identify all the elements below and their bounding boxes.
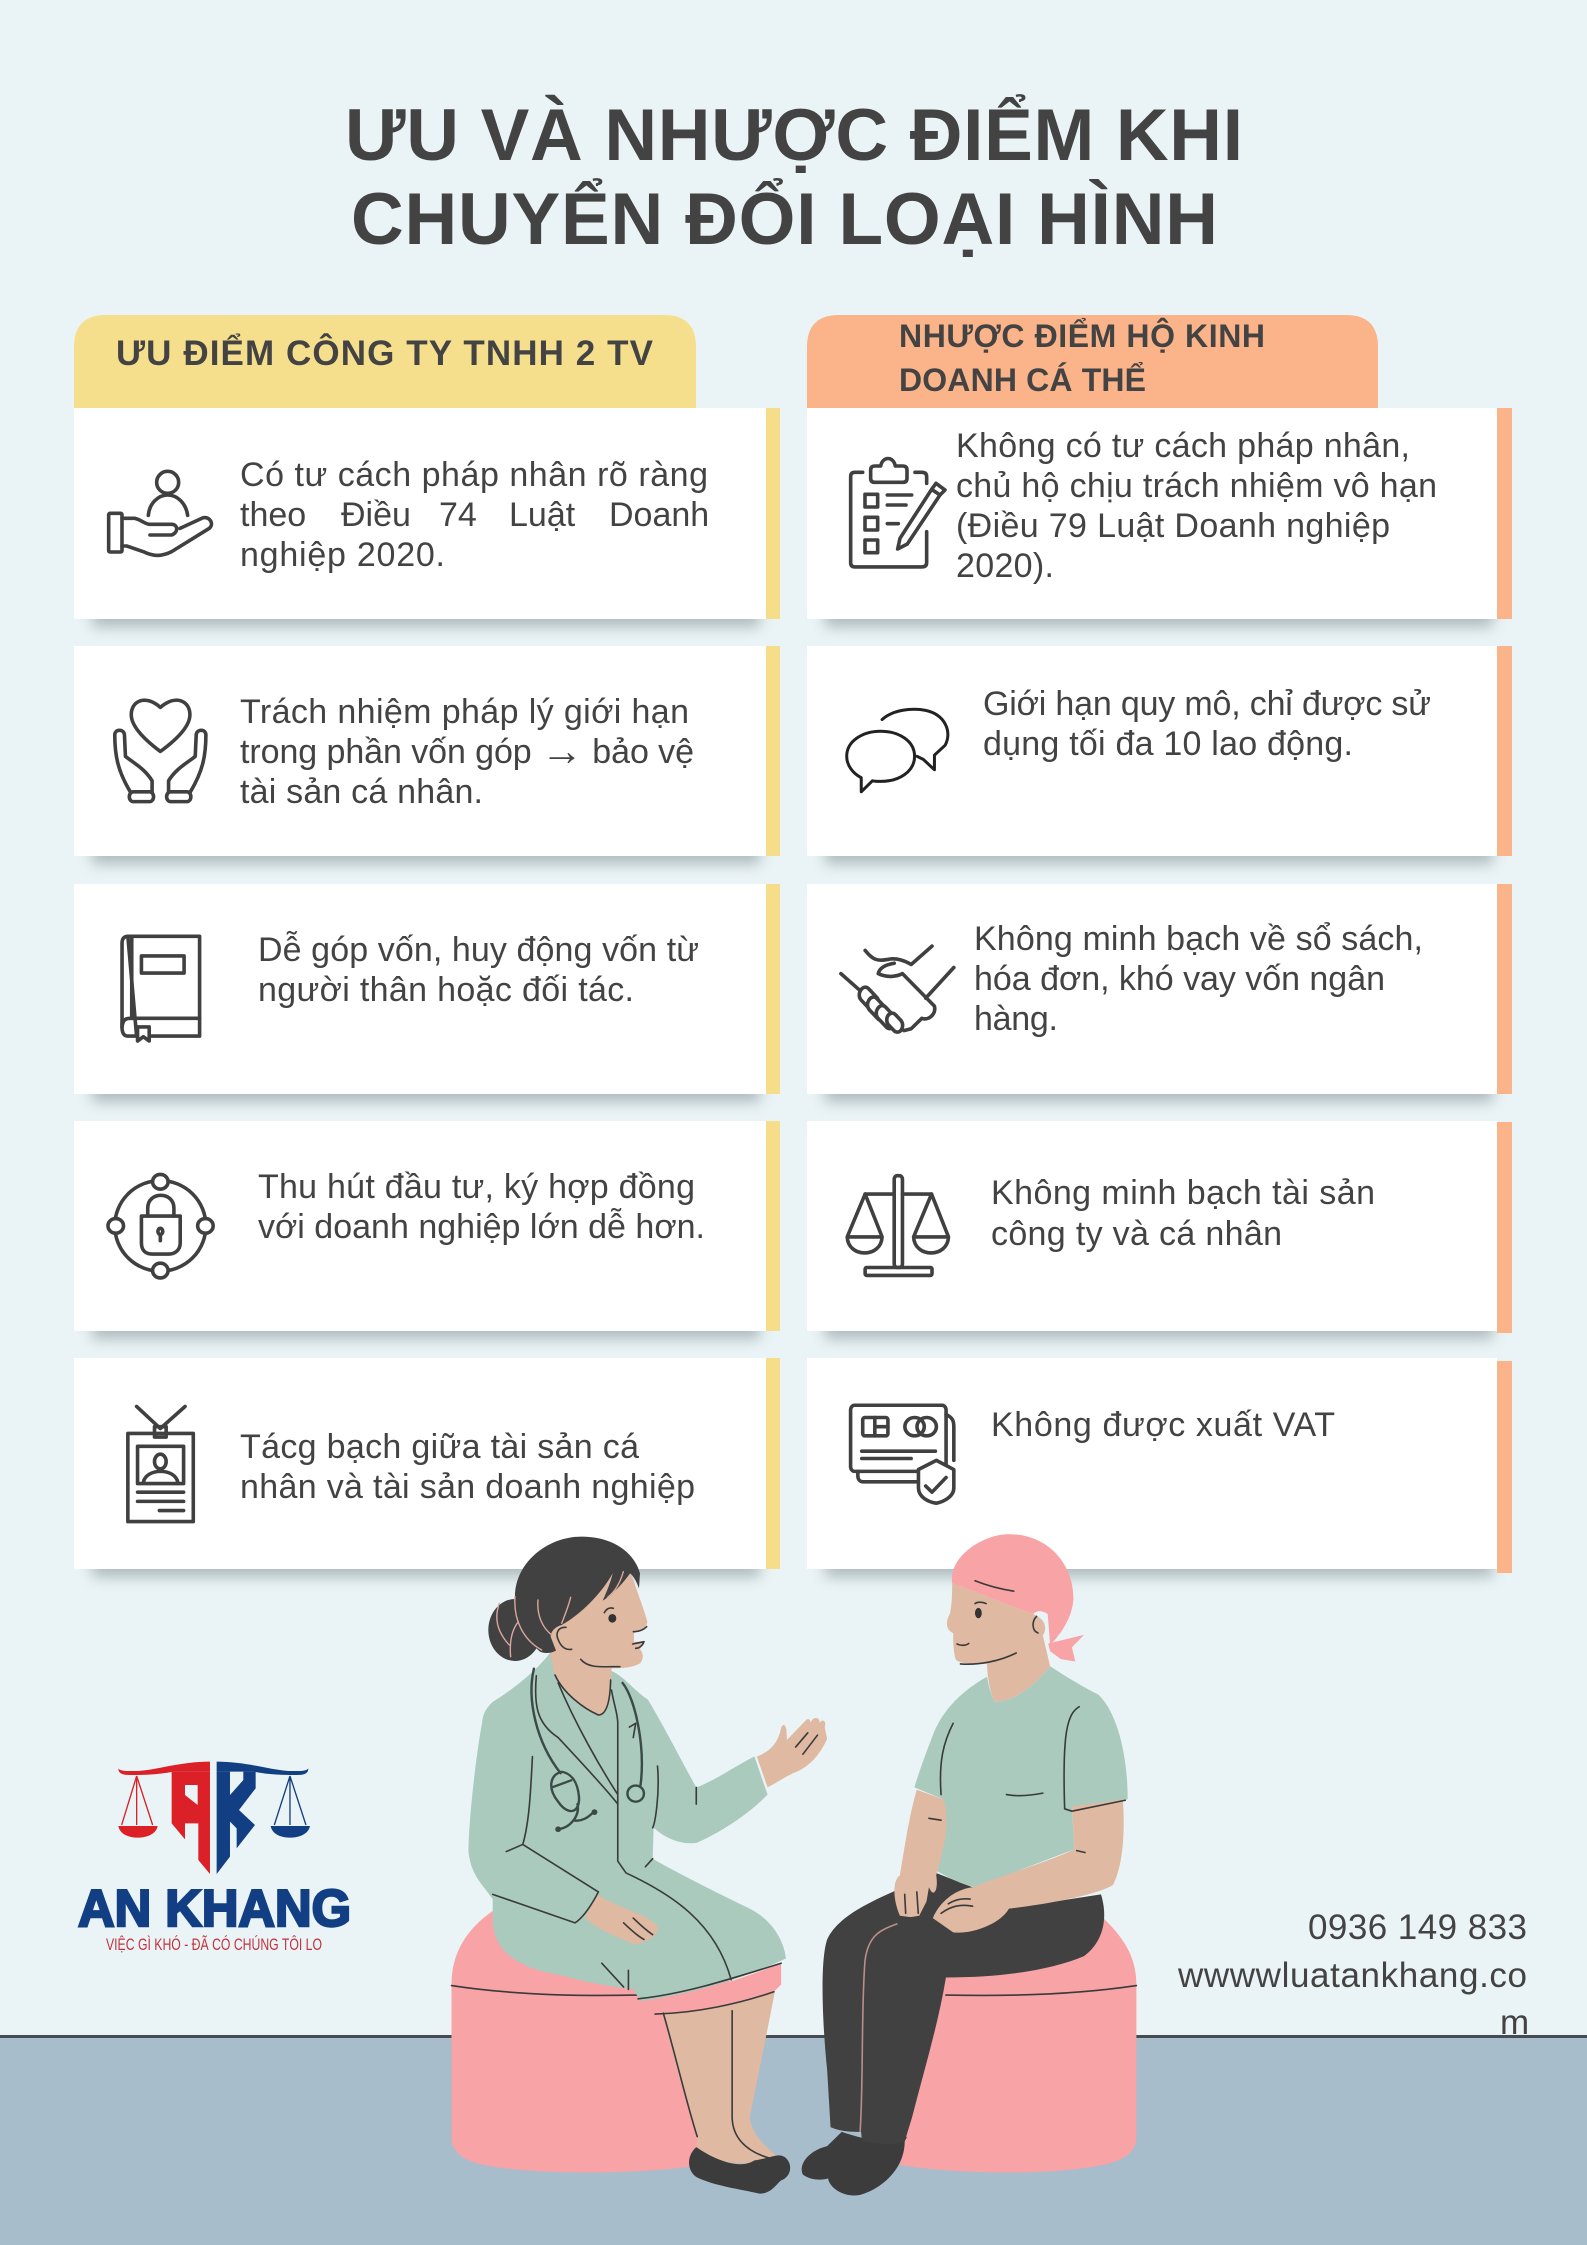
text: advantage 1: Doanh xyxy=(609,496,709,534)
text: advantage 2: → xyxy=(541,727,583,774)
text: advantage 5: nhân và tài sản doanh nghiệp xyxy=(240,1468,695,1506)
heading: advantages: ƯU ĐIỂM CÔNG TY TNHH 2 TV xyxy=(116,333,654,373)
patient: detail lines xyxy=(905,1581,1125,1913)
text: disadvantage 1: (Điều 79 Luật Doanh nghiệp xyxy=(956,507,1390,545)
text: disadvantage 4 xyxy=(991,1174,1375,1253)
icon: handshake xyxy=(841,946,954,1035)
heading: advantages xyxy=(74,315,696,408)
text: disadvantage 5: Không được xuất VAT xyxy=(991,1406,1335,1444)
text: advantage 2: bảo vệ xyxy=(583,733,694,771)
heading: disadvantages: NHƯỢC ĐIỂM HỘ KINH xyxy=(899,318,1265,354)
card: disadvantage 2 xyxy=(807,646,1512,864)
title: ƯU VÀ NHƯỢC ĐIỂM KHI xyxy=(345,95,1243,176)
text: disadvantage 2: dụng tối đa 10 lao động. xyxy=(983,725,1353,763)
text: advantage 4: Thu hút đầu tư, ký hợp đồng xyxy=(258,1168,695,1206)
text: advantage 1: theo xyxy=(240,496,306,534)
person: doctor body xyxy=(468,1653,827,2194)
card: advantage 3 xyxy=(74,884,780,1102)
text: advantage 1: nghiệp 2020. xyxy=(240,536,445,574)
text: disadvantage 1 xyxy=(956,427,1437,585)
contact details: 0936 149 833 xyxy=(1308,1908,1527,1947)
icon: book xyxy=(122,936,200,1041)
text: disadvantage 3 xyxy=(974,920,1423,1038)
text: advantage 5 xyxy=(240,1428,695,1506)
text: advantage 4: với doanh nghiệp lớn dễ hơn. xyxy=(258,1208,705,1246)
card: disadvantage 5 xyxy=(807,1358,1512,1577)
text: disadvantage 1: Không có tư cách pháp nhân, xyxy=(956,427,1410,465)
icon: speech bubbles xyxy=(847,709,948,792)
card: advantage 2 xyxy=(74,646,780,864)
person: patient xyxy=(802,1534,1128,2195)
text: advantage 3: Dễ góp vốn, huy động vốn từ xyxy=(258,931,699,969)
text: disadvantage 2 xyxy=(983,685,1431,763)
illustration: doctor and patient xyxy=(452,1534,1136,2195)
heading: disadvantages: DOANH CÁ THỂ xyxy=(899,362,1146,398)
stool: left xyxy=(452,1904,730,2172)
logo: An Khang xyxy=(78,1762,351,1954)
icon: hand holding person xyxy=(109,471,211,555)
text: disadvantage 2: Giới hạn quy mô, chỉ được sử xyxy=(983,685,1431,723)
title: CHUYỂN ĐỔI LOẠI HÌNH xyxy=(351,179,1218,260)
text: disadvantage 4: Không minh bạch tài sản xyxy=(991,1174,1375,1212)
card: disadvantage 1 xyxy=(807,408,1512,627)
text: advantage 1: 74 xyxy=(439,496,477,534)
icon: clipboard checklist xyxy=(851,458,945,567)
text: disadvantage 3: hàng. xyxy=(974,1000,1058,1038)
card: advantage 5 xyxy=(74,1358,780,1577)
card: advantage 1 xyxy=(74,408,780,627)
text: advantage 3 xyxy=(258,931,699,1009)
text: advantage 2 xyxy=(240,693,694,811)
text: disadvantage 1: chủ hộ chịu trách nhiệm vô hạn xyxy=(956,467,1437,505)
heading: disadvantages xyxy=(807,315,1378,408)
contact details: m xyxy=(1500,2003,1529,2042)
card: advantage 4 xyxy=(74,1121,780,1339)
icon: id badge xyxy=(128,1406,193,1522)
icon: credit card with shield xyxy=(851,1405,954,1503)
text: disadvantage 3: hóa đơn, khó vay vốn ngân xyxy=(974,960,1385,998)
title xyxy=(345,95,1243,260)
text: advantage 1 xyxy=(240,456,709,574)
card: disadvantage 3 xyxy=(807,884,1512,1102)
logo wordmark: AN KHANG xyxy=(78,1880,351,1938)
text: advantage 1: Luật xyxy=(509,496,576,534)
text: advantage 2: trong phần vốn góp xyxy=(240,733,532,771)
text: disadvantage 1: 2020). xyxy=(956,547,1054,585)
card: disadvantage 4 xyxy=(807,1121,1512,1339)
panel: advantages column xyxy=(74,315,780,1577)
icon: lock with ring xyxy=(108,1174,213,1278)
doctor head xyxy=(488,1537,647,1715)
stool: right xyxy=(900,1918,1136,2172)
text: advantage 4 xyxy=(258,1168,705,1246)
logo tagline: VIỆC GÌ KHÓ - ĐÃ CÓ CHÚNG TÔI LO xyxy=(106,1935,322,1954)
text: advantage 2: tài sản cá nhân. xyxy=(240,773,483,811)
icon: scales xyxy=(847,1176,948,1275)
text: advantage 2: Trách nhiệm pháp lý giới hạn xyxy=(240,693,689,731)
icon: hands holding heart xyxy=(115,700,206,802)
doctor: coat detail lines xyxy=(493,1676,817,2158)
text: advantage 1: Điều xyxy=(341,496,411,534)
stool seam lines xyxy=(452,1986,1136,1995)
text: advantage 1: Có tư cách pháp nhân rõ ràng xyxy=(240,456,708,494)
text: advantage 5: Tácg bạch giữa tài sản cá xyxy=(240,1428,639,1466)
panel: disadvantages column xyxy=(807,315,1512,1577)
text: disadvantage 3: Không minh bạch về sổ sách, xyxy=(974,920,1423,958)
text: disadvantage 4: công ty và cá nhân xyxy=(991,1215,1282,1253)
doctor: stethoscope xyxy=(532,1669,644,1829)
floor xyxy=(0,2035,1587,2245)
contact details xyxy=(1177,1908,1529,2042)
text: advantage 3: người thân hoặc đối tác. xyxy=(258,971,634,1009)
contact details: wwwwluatankhang.co xyxy=(1177,1956,1527,1995)
